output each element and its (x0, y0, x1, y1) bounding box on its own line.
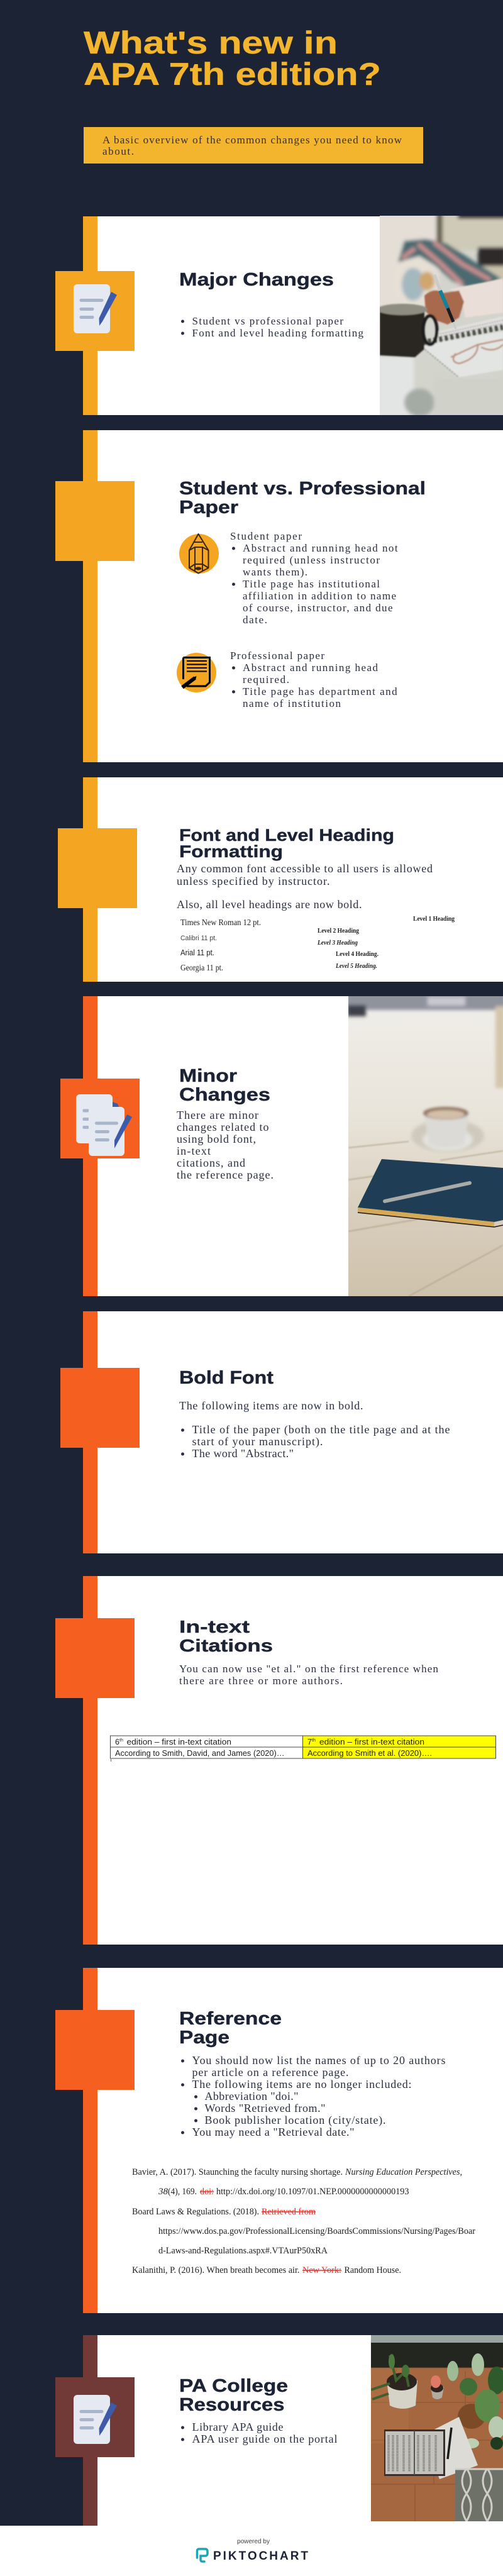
citation comparison table: 7 (307, 1738, 312, 1746)
professional paper text: Abstract and running head (243, 662, 379, 674)
reference examples: d-Laws-and-Regulations.aspx#.VTAurP50xRA (158, 2246, 328, 2256)
student paper text (230, 530, 398, 626)
reference examples: Nursing Education Perspectives, (345, 2167, 462, 2177)
reference examples: Retrieved from (262, 2207, 316, 2217)
body text (179, 1663, 439, 1687)
body text: the reference page. (177, 1169, 274, 1181)
patterned rug (455, 2468, 503, 2521)
reference examples: (4), 169. (168, 2187, 197, 2197)
footer: powered by piktochart (197, 2538, 308, 2563)
heading: Font and Level Heading (179, 826, 394, 845)
level heading examples: Level 5 Heading. (335, 963, 377, 970)
body text: using bold font, (177, 1133, 256, 1145)
heading: Changes (179, 1085, 270, 1105)
body text: The following items are now in bold. (179, 1399, 363, 1412)
body text: Also, all level headings are now bold. (177, 898, 362, 911)
student paper text: required (unless instructor (243, 554, 380, 566)
icon: document and pen (74, 284, 117, 333)
reference examples: Random House. (345, 2265, 401, 2275)
body text: You can now use "et al." on the first reference when (179, 1663, 439, 1675)
intro banner (84, 127, 423, 164)
font examples: Arial 11 pt. (180, 948, 214, 957)
bullet list: Library APA guide (192, 2421, 283, 2433)
level heading examples: Level 3 Heading (317, 940, 358, 947)
panel: reference page (55, 1968, 503, 2313)
student paper text: affiliation in addition to name (243, 590, 396, 602)
intro banner: A basic overview of the common changes you need to know (102, 134, 402, 146)
heading: Major Changes (179, 270, 334, 290)
bullet list: Book publisher location (city/state). (205, 2114, 386, 2127)
student paper text: Abstract and running head not (243, 542, 398, 554)
title: APA 7th edition? (84, 57, 381, 92)
heading (179, 2376, 288, 2415)
font examples (180, 918, 261, 973)
heading: In-text (179, 1617, 250, 1636)
panel: bold font (60, 1311, 503, 1553)
heading: Page (179, 2028, 229, 2048)
heading: Bold Font (179, 1368, 274, 1388)
plant pots (371, 2354, 444, 2409)
body text (177, 1109, 274, 1181)
heading: Formatting (179, 842, 283, 861)
bullet list: Words "Retrieved from." (205, 2102, 326, 2114)
font examples: Times New Roman 12 pt. (180, 918, 261, 928)
panel: minor changes (60, 992, 503, 1296)
reference examples: http://dx.doi.org/10.1097/01.NEP.0000000000000193 (216, 2187, 409, 2197)
level heading examples (317, 916, 455, 970)
bullet list (181, 2054, 445, 2138)
level heading examples: Level 4 Heading. (336, 951, 379, 958)
citation comparison table: edition – first in-text citation (127, 1738, 231, 1746)
icon: pencil (179, 534, 219, 574)
bullet list: Font and level heading formatting (192, 327, 363, 339)
student paper text: wants them). (243, 566, 307, 578)
bullet list: Student vs professional paper (192, 315, 343, 327)
body text: unless specified by instructor. (177, 875, 329, 887)
citation comparison table: th (312, 1738, 316, 1743)
footer: powered by piktochart: PIKTOCHART (213, 2550, 308, 2563)
citation comparison table: According to Smith, David, and James (2020)… (115, 1749, 284, 1758)
body text: start of your manuscript). (192, 1435, 323, 1448)
heading: PA College (179, 2376, 288, 2396)
body text (179, 1399, 450, 1460)
bullet list: APA user guide on the portal (192, 2433, 337, 2445)
bullet list: You may need a "Retrieval date." (192, 2126, 355, 2138)
panel: font and level heading formatting (58, 777, 503, 982)
citation comparison table: According to Smith et al. (2020)…. (307, 1749, 432, 1758)
reference examples: doi: (200, 2187, 214, 2197)
title (84, 25, 381, 92)
professional paper text (230, 650, 397, 709)
paper (434, 2417, 478, 2479)
reference examples: 38 (158, 2187, 169, 2197)
heading: Paper (179, 497, 238, 518)
body text: There are minor (177, 1109, 258, 1121)
reference examples: Kalanithi, P. (2016). When breath becomes air. (132, 2265, 299, 2275)
intro banner: about. (102, 145, 134, 157)
bullet list (181, 2421, 337, 2445)
professional paper text: required. (243, 674, 289, 686)
body text (177, 862, 433, 911)
citation comparison table: th (119, 1738, 123, 1743)
body text: Title of the paper (both on the title page and at the (192, 1423, 450, 1436)
heading: Minor (179, 1066, 237, 1086)
title: What's new in (84, 25, 338, 60)
heading (179, 826, 394, 861)
level heading examples: Level 2 Heading (318, 928, 360, 935)
citation comparison table: edition – first in-text citation (319, 1738, 424, 1746)
heading: Student vs. Professional (179, 479, 426, 499)
professional paper text: Professional paper (230, 650, 324, 662)
student paper text: of course, instructor, and due (243, 602, 392, 614)
heading (179, 479, 426, 518)
citation comparison table (111, 1736, 495, 1762)
font examples: Calibri 11 pt. (180, 935, 217, 942)
photo: book and plants on wooden floor (371, 2335, 503, 2521)
citation comparison table: 6 (115, 1738, 119, 1746)
photo: coffee and notebook (346, 992, 503, 1296)
level heading examples: Level 1 Heading (413, 916, 455, 923)
bullet list: Abbreviation "doi." (205, 2090, 298, 2102)
open book (384, 2429, 445, 2476)
bullet list: The following items are no longer included: (192, 2078, 411, 2090)
icon: document with pencil (177, 653, 216, 692)
body text: The word "Abstract." (192, 1447, 294, 1460)
body text: in-text (177, 1145, 211, 1157)
heading: Reference (179, 2009, 282, 2029)
reference examples: New York: (302, 2265, 341, 2275)
font examples: Georgia 11 pt. (180, 963, 223, 973)
heading (179, 1617, 273, 1655)
professional paper text: name of institution (243, 697, 341, 709)
body text: citations, and (177, 1157, 245, 1169)
bullet list: You should now list the names of up to 20 authors (192, 2054, 445, 2067)
photo: hand writing in notebook (376, 213, 503, 419)
student paper text: Student paper (230, 530, 302, 542)
heading (179, 1066, 270, 1105)
icon: two documents and pen (76, 1094, 132, 1156)
body text: changes related to (177, 1121, 269, 1133)
body text: there are three or more authors. (179, 1675, 343, 1687)
panel: pa college resources (55, 2335, 503, 2526)
panel: in-text citations (55, 1576, 503, 1945)
reference examples (132, 2167, 475, 2275)
footer: powered by piktochart: powered by (237, 2538, 270, 2545)
professional paper text: Title page has department and (243, 686, 397, 697)
icon: document and pen (74, 2395, 117, 2444)
bullet list: per article on a reference page. (192, 2066, 348, 2079)
student paper text: date. (243, 614, 267, 626)
bullet list (181, 315, 363, 339)
icon: piktochart logo (197, 2549, 207, 2562)
heading: Citations (179, 1636, 273, 1655)
large plant (447, 2353, 503, 2450)
panel: student vs professional paper (55, 430, 503, 762)
reference examples: https://www.dos.pa.gov/ProfessionalLicensing/BoardsCommissions/Nursing/Pages/Boar (158, 2226, 475, 2236)
heading (179, 2009, 282, 2048)
panel: major changes (55, 213, 503, 419)
reference examples: Board Laws & Regulations. (2018). (132, 2207, 259, 2217)
heading: Resources (179, 2395, 284, 2415)
body text: Any common font accessible to all users is allowed (177, 862, 433, 875)
reference examples: Bavier, A. (2017). Staunching the faculty nursing shortage. (132, 2167, 343, 2177)
student paper text: Title page has institutional (243, 578, 380, 590)
